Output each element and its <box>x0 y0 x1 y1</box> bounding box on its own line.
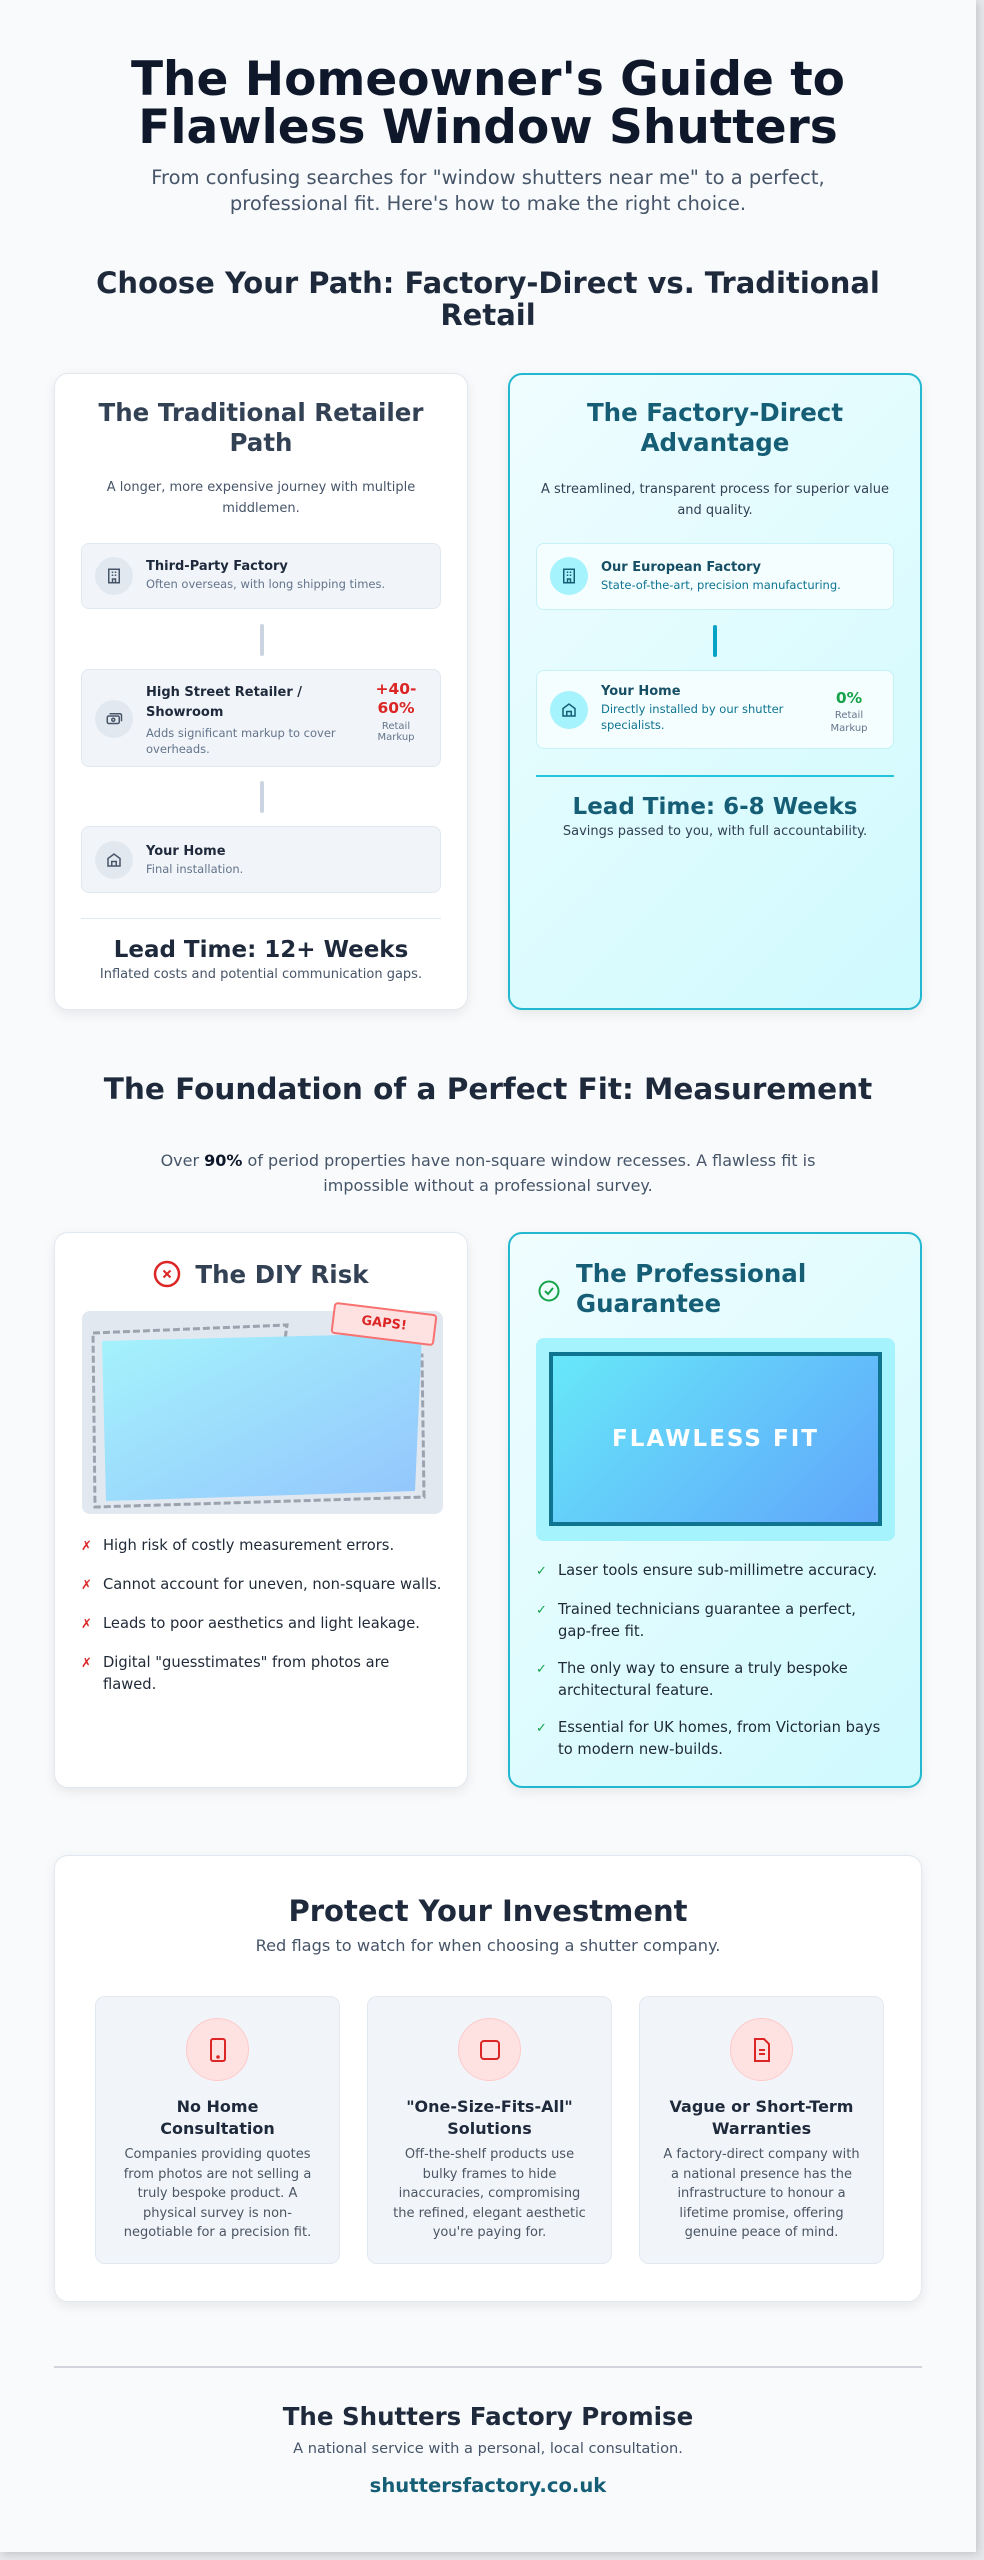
list: benefits: Essential for UK homes, from Victorian bays to modern new-builds. <box>558 1719 880 1758</box>
step: your home: Directly installed by our shutter specialists. <box>601 702 783 732</box>
panel title: Advantage <box>641 428 789 457</box>
panel subtitle: A longer, more expensive journey with multiple middlemen. <box>107 480 415 516</box>
red flag: no home consultation: Companies providing quotes from photos are not selling a truly bespoke product. A physical survey is non-negotiable for a precision fit. <box>124 2147 311 2240</box>
heading: measurement: The Foundation of a Perfect Fit: Measurement <box>104 1072 872 1106</box>
markup stat <box>830 689 868 734</box>
step: your home: Final installation. <box>146 862 243 876</box>
markup stat: +40- <box>376 680 416 698</box>
red flag: one-size-fits-all: Solutions <box>447 2119 532 2138</box>
panel: professional guarantee <box>508 1232 922 1788</box>
list: benefits: ✓ <box>536 1603 547 1618</box>
subtitle: From confusing searches for "window shutters near me" to a perfect, <box>151 166 825 189</box>
lead time: Savings passed to you, with full accountability. <box>563 824 867 839</box>
list: benefits: Laser tools ensure sub-millimetre accuracy. <box>558 1562 877 1579</box>
icon: document <box>730 2018 793 2081</box>
step: your home <box>81 826 441 893</box>
list: risks: ✗ <box>81 1578 92 1593</box>
step: high street retailer: High Street Retailer / Showroom <box>146 685 302 720</box>
lead time: Inflated costs and potential communication gaps. <box>100 967 422 982</box>
icon: factory <box>550 557 588 595</box>
panel: DIY risk <box>54 1232 468 1788</box>
list: risks: Cannot account for uneven, non-square walls. <box>103 1576 441 1593</box>
list: risks: High risk of costly measurement errors. <box>103 1537 394 1554</box>
list: risks: ✗ <box>81 1539 92 1554</box>
panel subtitle: A streamlined, transparent process for superior value and quality. <box>541 482 889 518</box>
footer: shuttersfactory.co.uk <box>370 2474 606 2497</box>
markup stat: 0% <box>836 689 862 707</box>
panel: factory-direct advantage <box>508 373 922 1010</box>
step: third-party factory: Third-Party Factory <box>146 559 288 574</box>
step: third-party factory <box>81 543 441 609</box>
list: benefits <box>536 1562 880 1758</box>
title <box>131 52 845 155</box>
heading: choose your path <box>96 266 880 332</box>
panel title: The Factory-Direct <box>587 398 843 427</box>
illustration: flawless fit: FLAWLESS FIT <box>612 1426 819 1452</box>
markup stat: Markup <box>830 723 868 734</box>
subtitle: professional fit. Here's how to make the right choice. <box>230 192 746 215</box>
red flag: one-size-fits-all: Off-the-shelf products use bulky frames to hide inaccuracies, compromising the refined, elegant aesthetic you're paying for. <box>393 2147 586 2240</box>
title: The Homeowner's Guide to <box>131 52 845 107</box>
markup stat: Retail <box>382 721 410 732</box>
panel title: Path <box>230 428 292 457</box>
heading: choose your path: Retail <box>440 298 536 332</box>
subheading: Red flags to watch for when choosing a shutter company. <box>256 1936 720 1955</box>
list: risks: Leads to poor aesthetics and light leakage. <box>103 1615 420 1632</box>
markup stat: 60% <box>377 699 415 717</box>
illustration: gaps <box>82 1311 443 1514</box>
label: gaps: GAPS! <box>361 1313 408 1334</box>
panel: traditional retailer path <box>54 373 468 1010</box>
icon: phone <box>186 2018 249 2081</box>
title: Flawless Window Shutters <box>138 100 838 155</box>
markup stat <box>376 680 416 743</box>
list: risks: ✗ <box>81 1617 92 1632</box>
icon: home <box>95 841 133 879</box>
icon: home <box>550 691 588 729</box>
red flag: vague warranties: Warranties <box>712 2119 811 2138</box>
heading with icon <box>538 1259 806 1318</box>
list: risks: ✗ <box>81 1656 92 1671</box>
list: benefits: The only way to ensure a truly bespoke architectural feature. <box>558 1660 848 1699</box>
heading: choose your path: Choose Your Path: Factory-Direct vs. Traditional <box>96 266 880 300</box>
list: risks: Digital "guesstimates" from photos are flawed. <box>103 1654 389 1693</box>
heading with icon: The Professional <box>576 1259 806 1288</box>
panel: protect your investment <box>54 1855 922 2302</box>
list: benefits: ✓ <box>536 1721 547 1736</box>
icon: building <box>95 557 133 595</box>
list: risks <box>81 1537 441 1693</box>
step: third-party factory: Often overseas, with long shipping times. <box>146 577 385 591</box>
illustration: flawless fit <box>536 1338 895 1541</box>
red flag: vague warranties <box>639 1996 884 2264</box>
step: your home: Your Home <box>601 684 681 699</box>
step: high street retailer <box>81 669 441 767</box>
step: european factory <box>536 543 894 610</box>
red flag: one-size-fits-all <box>367 1996 612 2264</box>
red flag: vague warranties: Vague or Short-Term <box>670 2097 853 2116</box>
icon: square <box>458 2018 521 2081</box>
panel title <box>98 398 424 457</box>
icon: money <box>95 700 133 738</box>
paragraph: 90% stat: Over 90% of period properties have non-square window recesses. A flawless fit is impossible without a professional survey. <box>161 1151 815 1195</box>
footer: The Shutters Factory Promise <box>283 2402 693 2431</box>
step: your home: Your Home <box>146 844 226 859</box>
markup stat: Markup <box>377 732 415 743</box>
step: your home <box>536 670 894 749</box>
step: european factory: State-of-the-art, precision manufacturing. <box>601 578 841 592</box>
lead time <box>563 794 867 839</box>
panel title: The Traditional Retailer <box>99 398 423 427</box>
lead time: Lead Time: 12+ Weeks <box>114 937 408 963</box>
label: gaps <box>330 1302 438 1346</box>
heading with icon: Guarantee <box>576 1289 721 1318</box>
red flag: one-size-fits-all: "One-Size-Fits-All" <box>406 2097 573 2116</box>
list: benefits: ✓ <box>536 1564 547 1579</box>
markup stat: Retail <box>835 710 863 721</box>
lead time: Lead Time: 6-8 Weeks <box>573 794 857 820</box>
list: benefits: Trained technicians guarantee a perfect, gap-free fit. <box>558 1601 856 1640</box>
red flag: vague warranties: A factory-direct company with a national presence has the infrastructure to honour a lifetime promise, offering genuine peace of mind. <box>663 2147 860 2240</box>
panel title <box>587 398 843 457</box>
heading with icon: The DIY Risk <box>195 1260 369 1289</box>
footer: A national service with a personal, local consultation. <box>293 2440 683 2457</box>
lead time <box>100 937 422 982</box>
step: high street retailer: Adds significant markup to cover overheads. <box>146 726 336 756</box>
heading: Protect Your Investment <box>288 1894 688 1928</box>
red flag: no home consultation <box>95 1996 340 2264</box>
subtitle <box>151 166 825 215</box>
step: european factory: Our European Factory <box>601 560 761 575</box>
footer <box>282 2402 693 2497</box>
red flag: no home consultation: No Home <box>177 2097 258 2116</box>
list: benefits: ✓ <box>536 1662 547 1677</box>
red flag: no home consultation: Consultation <box>160 2119 275 2138</box>
